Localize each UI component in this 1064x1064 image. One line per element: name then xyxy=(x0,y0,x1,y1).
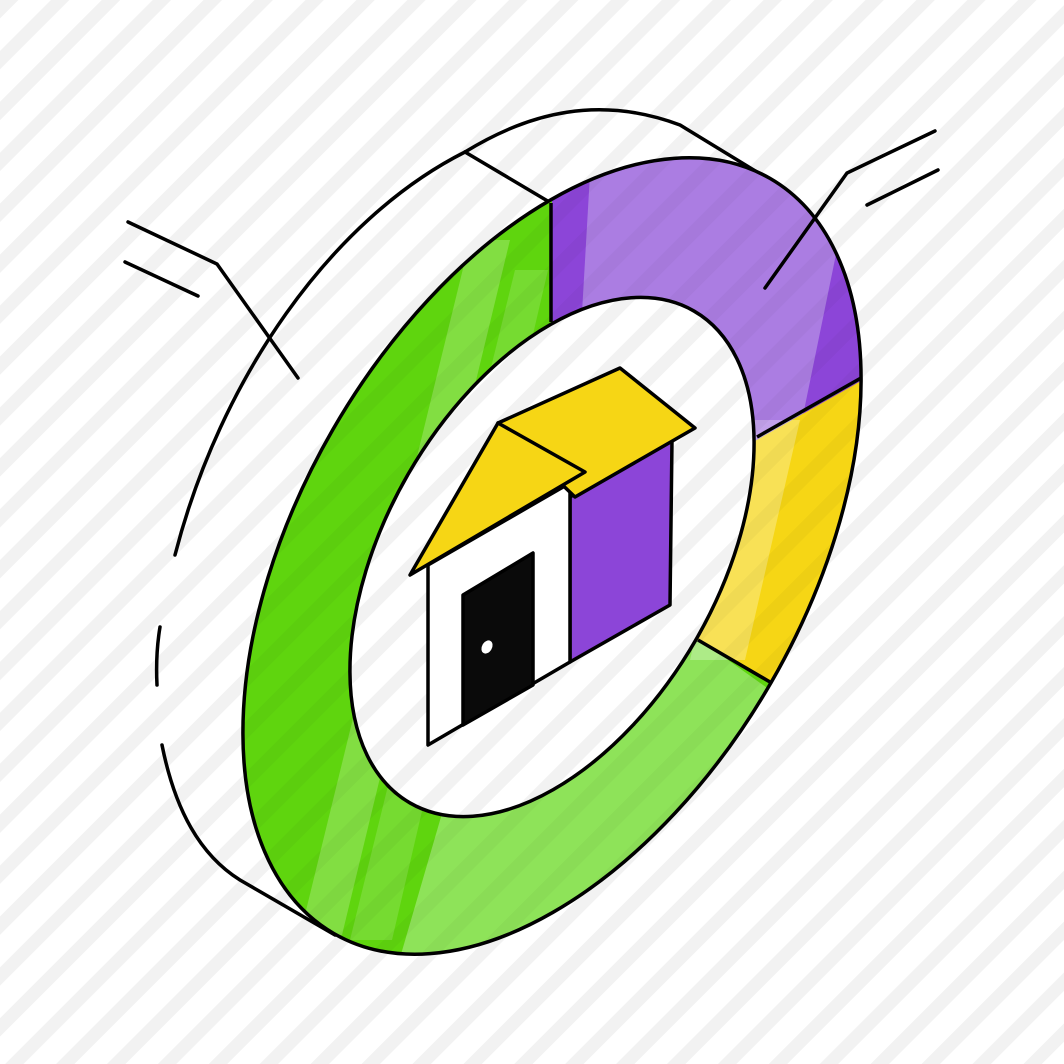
segment: purple xyxy=(582,160,836,440)
icon: house xyxy=(410,368,695,745)
back shell outline xyxy=(157,110,770,935)
roof gable xyxy=(410,423,585,575)
roof panel xyxy=(498,368,695,497)
callout lines left xyxy=(125,222,298,378)
door xyxy=(463,553,533,725)
house front wall xyxy=(428,483,570,745)
callout lines right xyxy=(765,131,938,288)
segment: yellow xyxy=(697,382,860,680)
ring chart xyxy=(241,156,863,956)
segment: green xyxy=(244,201,804,952)
house side wall xyxy=(570,440,672,662)
